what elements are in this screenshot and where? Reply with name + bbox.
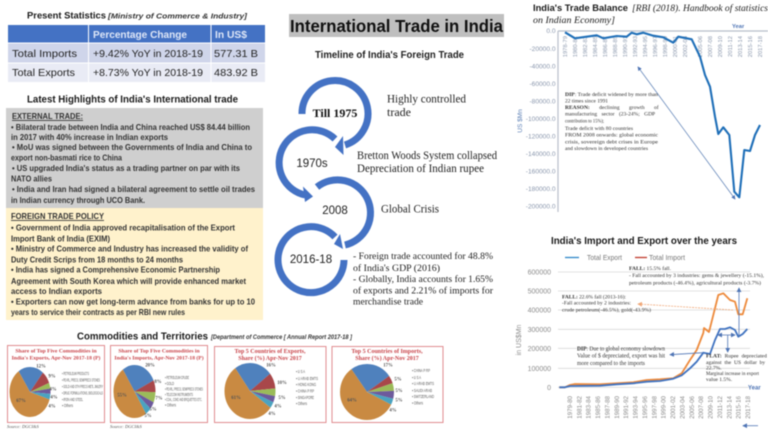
heading: commodities and territories: [Department of Commerce [ Annual Report 2017-18 ] [210,335,353,341]
x axis labels: 2005-06 [689,395,696,419]
panel: pie chart imports commodities: ▪ GOLD [165,381,174,386]
panel: pie chart export countries: ▪ U S A [296,369,305,374]
heading: trade balance [533,3,768,25]
panel: external trade: in Indian currency through UCO Bank. [11,195,145,205]
y axis labels: -40000.0 [529,64,556,70]
legend: Total Export [587,255,622,262]
panel: pie chart import countries: 17% [383,364,393,368]
x axis labels: 1995-96 [642,395,649,419]
panel: foreign trade policy [6,208,263,320]
x axis labels: 2001-02 [670,395,677,419]
annotation: trade deficit: REASON: declining growth of [565,104,659,111]
panel: foreign trade policy: • Government of India approved recapitalisation of the Export [11,223,235,233]
timeline label: 2016-18: of exports and 2.21% of imports for [353,286,494,296]
annotation: fall 22.6%: crude petroleum(-46.5%), gold(-43.9%) [562,307,651,314]
table: present statistics: 483.92 B [214,67,258,79]
x axis labels: 1983-84 [586,395,593,419]
panel: pie chart imports commodities: ▪ COAL, COKE AND BRIQUETTES ETC. [165,397,202,402]
x axis labels [567,395,752,419]
y axis labels: -100000.0 [526,116,556,123]
timeline label: till 1975: trade [387,105,411,119]
panel: pie chart import countries: ▪ Others [412,400,424,406]
annotation: fall 22.6%: FALL: 22.6% fall (2013-16): [562,293,626,300]
panel: pie chart imports commodities: 8% [154,380,162,385]
panel: foreign trade policy: Import Bank of India (EXIM) [11,234,110,244]
y axis labels: 200000 [528,346,551,353]
timeline label: till 1975: Till 1975 [313,106,357,120]
y axis labels: -140000.0 [526,151,556,158]
panel: pie chart imports commodities: ▪ TELECOM INSTRUMENTS [165,392,193,397]
annotation: flat: against the US dollar by [706,360,765,366]
timeline label: 2016-18: merchandise trade [353,298,423,308]
timeline label: 2016-18: of India's GDP (2016) [353,263,440,274]
timeline label: 2008 [322,202,439,217]
panel: pie chart import countries: ▪ SAUDI ARAB [412,388,432,393]
panel: pie chart import countries: 64% [347,398,357,404]
annotation: dip: DIP: Due to global economy slowdown [577,347,665,353]
annotation: trade deficit [565,91,659,152]
y axis labels: 100000 [528,366,551,373]
timeline label: 1970s [296,148,497,175]
heading: present statistics [27,10,248,22]
panel: pie chart export countries: ▪ SINGAPORE [296,395,314,400]
heading: commodities and territories: Commodities and Territories [77,330,208,342]
pie: import countries [354,378,380,406]
panel: pie chart import countries: 4% [389,408,397,414]
panel: pie chart exports commodities: 12% [36,364,46,370]
x axis labels: 1979-80 [567,395,574,419]
y axis labels [526,28,556,210]
timeline label: 2016-18: 2016-18 [290,254,332,266]
y axis labels: -20000.0 [529,46,556,53]
panel: pie chart imports commodities: 55% [117,394,127,398]
panel: pie chart import countries: 5% [395,398,403,404]
timeline label: 2016-18: - Foreign trade accounted for 48.8% [353,251,493,262]
x axis labels: 1991-92 [623,395,630,419]
annotation: flat [706,354,767,383]
panel: foreign trade policy: • Ministry of Commerce and Industry has increased the validity of [11,244,248,254]
annotation: trade deficit: 22 times since 1991 [565,98,608,104]
panel: pie chart imports commodities: 7% [155,396,163,402]
panel: pie chart exports commodities: ▪ DRUG FORMULATIONS, BIOLOGICALS [62,390,103,396]
panel: pie chart exports commodities: 67% [16,399,26,404]
x axis labels: 2007-08 [698,395,705,419]
y axis labels: 400000 [528,308,551,314]
annotation: trade deficit: contribution to 15%); [565,118,604,125]
x axis labels: 2005-06 [698,36,704,57]
panel: pie chart exports commodities: ▪ IRON AND STEEL [62,397,83,402]
panel: pie chart export countries: 16% [266,364,276,368]
panel: pie chart import countries: Share (%) Apr-Nov 2017 [355,355,419,362]
panel: pie chart imports commodities: India's Imports, Apr-Nov 2017-18 (P) [114,354,204,361]
panel: pie chart export countries: 4% [268,412,276,417]
chart: trade balance line chart [517,24,768,212]
y axis labels: -200000.0 [526,204,556,210]
panel: foreign trade policy: FOREIGN TRADE POLICY [11,211,104,221]
x axis labels: 1994-95 [643,36,649,57]
panel: pie chart exports commodities: ▪ PETROLEUM PRODUCTS [62,371,89,376]
panel: pie chart import countries: ▪ U S A [412,375,421,380]
x axis labels: 2015-16 [736,395,743,419]
x axis labels: 2007-08 [708,36,714,57]
annotation: fall 15.5%: FALL: 15.5% fall. [629,265,672,272]
x axis labels: 2011-12 [717,395,724,418]
heading: trade balance: on Indian Economy] [533,15,616,25]
timeline label: 2008: 2008 [322,205,348,217]
panel: pie chart export countries: ▪ HONG KONG [296,382,316,387]
panel: external trade: in 2017 with 40% increase in Indian exports [11,132,168,142]
y axis labels: -120000.0 [526,134,556,140]
arrow: deficit span [638,67,735,199]
panel: pie chart exports commodities: 4% [49,388,57,392]
x axis labels: 1990-91 [623,36,629,57]
panel: pie chart import countries: ▪ SWITZERLAND [412,394,434,399]
y axis title: US $Mn [517,109,524,133]
y axis labels: -80000.0 [529,98,556,106]
line: trade balance [565,32,760,197]
table: present statistics: Total Exports [12,67,75,79]
panel: pie chart imports commodities: ▪ PETROLEUM CRUDE [165,375,189,380]
panel: pie chart export countries: 5% [278,396,286,401]
annotation: trade deficit: manufacturing sector (23-24%; GDP [565,111,655,118]
pie: export countries [237,377,263,405]
legend: Total Import [649,255,685,262]
panel: pie chart export countries: ▪ U ARAB EMTS [296,376,318,381]
panel: pie chart imports commodities: Share of Top Five Commodities in [118,349,200,355]
x axis labels: 1986-87 [603,36,609,57]
panel: pie chart exports commodities: 4% [50,396,58,400]
panel: pie chart export countries: ▪ CHINA P RP [296,388,314,394]
x axis labels: 1988-89 [613,36,619,57]
x axis labels: 1989-90 [614,395,621,419]
panel: pie chart import countries: 5% [394,378,402,382]
panel: pie chart import countries: Top 5 Countries of Imports, [351,349,423,355]
x axis labels: 2002-03 [683,36,689,57]
y axis labels: 600000 [528,270,551,276]
arrows: annotation pointers [638,288,758,426]
annotation: trade deficit: FROM 2008 onwards: global economic [565,133,659,139]
annotation: fall 15.5%: petroleum products (-46.4%), agricultural products (-3.7%) [629,279,761,286]
y axis labels [528,270,551,392]
annotation: dip: Value of $ depreciated, export was hit [577,352,665,360]
legend [565,255,685,262]
x axis labels: 2003-04 [679,395,686,419]
annotation: flat: FLAT: Rupee depreciated [706,354,767,360]
panel: pie chart imports commodities: 20% [145,364,155,368]
panel: external trade: • US upgraded India's status as a trading partner on par with its [12,163,240,173]
title: International Trade in India [290,16,503,36]
panel: pie chart export countries: 10% [277,381,287,386]
x axis labels [563,35,764,57]
heading: present statistics: Present Statistics [27,10,106,22]
panel: foreign trade policy: • Exporters can now get long-term advance from banks for up to 10 [11,296,255,306]
x axis labels: 1982-83 [583,36,589,57]
panel: pie chart import countries: ▪ U ARAB EMTS [412,381,434,386]
annotation: dip: more compared to the imports [577,361,646,367]
panel: external trade: NATO allies [11,174,52,184]
panel: external trade [6,108,263,208]
panel: foreign trade policy: Agreement with South Korea which will provide enhanced market [11,276,246,286]
timeline label: 1970s: Depreciation of Indian rupee [357,161,484,175]
y axis labels: 300000 [528,327,551,334]
annotation: trade deficit: crisis, sovereign debt crises in Europe [565,139,659,145]
annotation: fall 15.5% [629,265,765,286]
x axis labels: 2009-10 [718,36,724,57]
y axis labels: -60000.0 [529,81,556,88]
panel: pie chart export countries: 4% [274,404,282,410]
x axis labels: 2017-18 [758,36,764,57]
x axis labels: 2013-14 [726,395,733,419]
pie: imports commodities [124,378,145,405]
x axis labels: 1985-86 [595,395,602,419]
panel: pie chart exports commodities: ▪ Others [62,403,74,408]
x axis labels: 2015-16 [748,36,754,57]
panel: external trade: • India and Iran had signed a bilateral agreement to settle oil trades [12,184,255,194]
timeline: circular arrows [278,81,370,293]
panel: external trade: export non-basmati rice to China [11,153,122,163]
table: present statistics: 577.31 B [214,48,258,60]
x axis labels: 1978-79 [563,36,569,57]
table: present statistics: Total Imports [12,48,77,60]
annotation: flat: value 1.5%. [706,377,733,383]
table: present statistics: +9.42% YoY in 2018-19 [93,48,203,60]
annotation: trade deficit: DIP: Trade deficit widened by more than [565,91,658,98]
annotation: fall 22.6%: -Fall accounted by 2 industries: [562,300,631,306]
panel: pie chart export countries: Share (%) Apr-Nov 2017 [238,355,302,362]
x axis labels: 1997-98 [651,395,658,419]
x axis labels: 1996-97 [653,36,659,57]
y axis labels: 0 [547,385,551,392]
panel: pie chart exports commodities: ▪ GOLD AND OTH PRECS METL JWLERY [62,384,103,389]
panel: foreign trade policy: • India has signed a Comprehensive Economic Partnership [11,265,220,275]
x axis labels: 1998-99 [663,36,669,57]
annotation: flat: 22.7%. [706,365,722,371]
heading: latest highlights: Latest Highlights of India's International trade [27,94,238,106]
panel: pie chart export countries: ▪ Others [296,401,308,406]
annotation: trade deficit: and slowdown in developed countries [565,146,648,152]
x axis labels: 1987-88 [604,395,612,419]
x axis labels: 2013-14 [738,35,744,57]
timeline label: 2016-18: - Globally, India accounts for 1.65% [353,274,493,285]
panel: pie chart exports commodities: Share of Top Five Commodities in [15,349,97,355]
heading: import and export: India's Import and Export over the years [551,235,737,247]
x axis labels: 2011-12 [728,36,734,57]
panel: pie chart imports commodities: 5% [149,408,157,412]
heading: trade balance: [RBI (2018). Handbook of statistics [632,3,768,13]
x axis labels: 1993-94 [633,395,640,419]
timeline label: 2016-18 [290,251,494,308]
year label: Year [732,24,745,30]
x axis labels: 1999-00 [661,395,668,419]
annotation: fall 15.5%: - Fall accounted by 3 industries: gems & jewellery (-15.1%), [629,272,765,279]
panel: pie chart imports commodities [110,346,208,422]
panel: external trade: • MoU was signed between the Governments of India and China to [12,142,252,152]
timeline label: 1970s: Bretton Woods System collapsed [357,148,497,162]
panel: pie chart import countries [332,346,443,422]
source notes [7,424,142,429]
x axis labels: 1980-81 [573,36,579,57]
line: total import [559,293,747,387]
panel: pie chart imports commodities: ▪ PEARL, PRECS, SEMIPRECS STONES [165,386,203,392]
x axis labels: 1981-82 [576,395,583,419]
panel: foreign trade policy: access to Indian exports [11,286,102,296]
timeline label: till 1975: Highly controlled [387,92,466,106]
panel: pie chart imports commodities: 5% [144,414,152,419]
panel: foreign trade policy: Duty Credit Scrips from 18 months to 24 months [11,254,183,264]
x axis labels: 2009-10 [708,395,714,419]
panel: pie chart imports commodities: ▪ Others [165,402,177,408]
annotation: flat: Marginal increase in export [706,371,759,377]
timeline label: 1970s: 1970s [296,158,328,170]
table: present statistics [8,25,265,82]
y axis labels: -180000.0 [526,186,556,193]
panel: foreign trade policy: years to service their contracts as per RBI new rules [11,307,185,317]
y axis title: in US$Mn [516,325,523,355]
table: present statistics: Percentage Change [93,29,187,41]
annotation: fall 22.6% [562,293,651,314]
annotation: trade deficit: Trade deficit with 80 countries [565,125,633,132]
x axis labels: 2017-18 [745,395,752,419]
pie: exports commodities [20,380,40,404]
panel: pie chart exports commodities: 9% [48,374,56,380]
timeline label: till 1975 [313,92,466,120]
panel: pie chart export countries: Top 5 Countries of Exports, [235,349,306,355]
source notes: Source: DGCI&S [7,424,39,429]
panel: external trade: • Bilateral trade between India and China reached US$ 84.44 billion [11,122,250,132]
panel: pie chart exports commodities: India's Exports, Apr-Nov 2017-18 (P) [12,354,101,361]
x axis labels: 2000-01 [673,36,679,57]
source notes: Source: DGCI&S [110,424,142,429]
panel: pie chart export countries [214,346,326,422]
panel: pie chart export countries: 61% [231,396,241,401]
table: present statistics: In US$ [215,29,247,41]
year label: Year [748,386,761,392]
panel: pie chart exports commodities: 4% [48,404,56,410]
heading: trade balance: India's Trade Balance [533,3,628,14]
heading: present statistics: [Ministry of Commerce & Industry] [107,12,248,20]
timeline label: 2008: Global Crisis [381,202,439,216]
heading: commodities and territories [77,330,353,342]
heading: timeline: Timeline of India's Foreign Trade [315,50,464,61]
chart: import and export line chart [516,270,761,426]
panel: pie chart import countries: 5% [395,389,403,394]
panel: external trade: EXTERNAL TRADE: [12,111,83,121]
y axis labels: 500000 [528,288,551,296]
x axis labels: 1984-85 [593,36,599,57]
y axis labels: -160000.0 [526,168,556,176]
panel: pie chart exports commodities: ▪ PEARL, PRECS, SEMIPRECS STONES [62,378,100,382]
x axis labels: 1992-93 [633,36,639,57]
panel: pie chart import countries: ▪ CHINA P RP [412,368,430,373]
annotation: dip [577,347,665,367]
y axis labels: 0.0 [546,28,556,35]
panel: pie chart exports commodities [8,346,104,422]
table: present statistics: +8.73% YoY in 2018-19 [93,67,203,79]
line: total export [559,327,747,387]
